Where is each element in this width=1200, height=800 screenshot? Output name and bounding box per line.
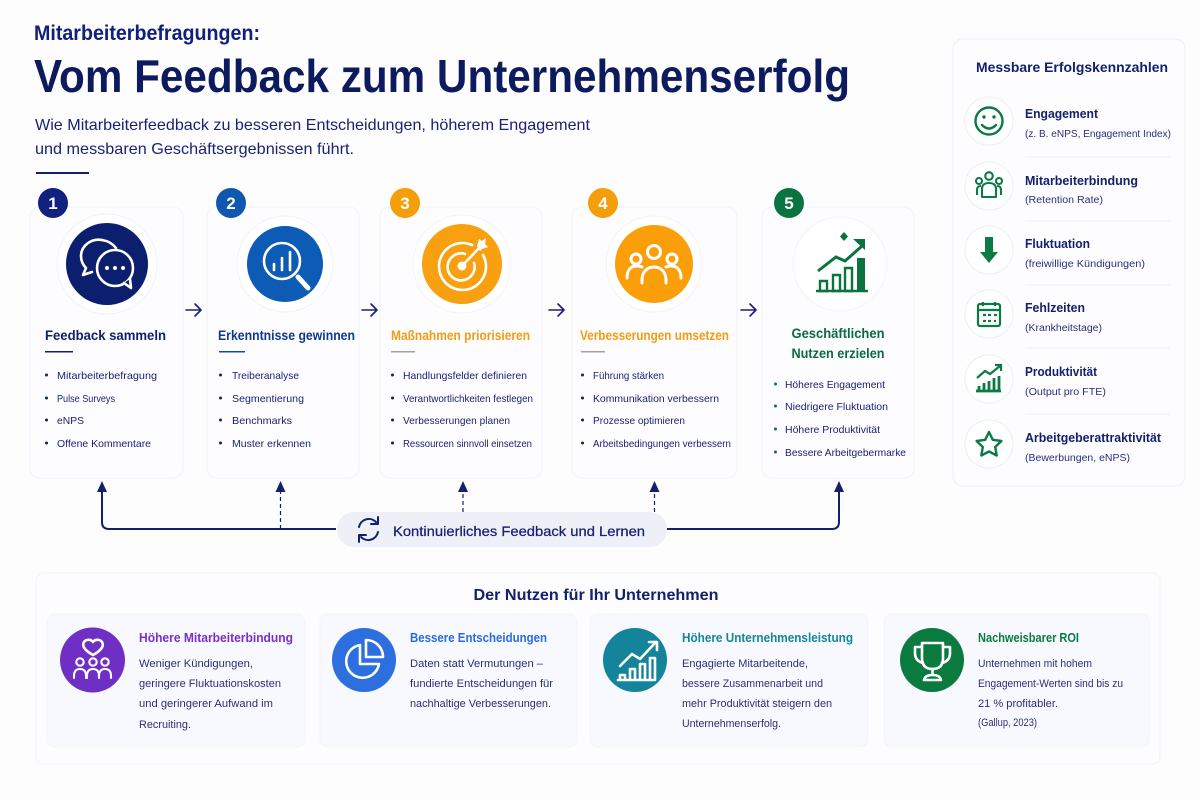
benefit: decisions [320, 614, 577, 747]
heading: Erkenntnisse gewinnen [218, 327, 355, 343]
bullet list: Arbeitsbedingungen verbessern [593, 438, 731, 450]
title: Vom Feedback zum Unternehmenserfolg [34, 50, 850, 102]
panel: step 1 [30, 188, 183, 478]
bullet list: Verantwortlichkeiten festlegen [403, 393, 533, 405]
heading: Nutzen erzielen [792, 345, 884, 361]
panel: step 4 [572, 188, 737, 478]
badge 3: 3 [400, 194, 410, 213]
icon: team [606, 216, 702, 312]
kpi: retention: Mitarbeiterbindung [1025, 174, 1138, 188]
bullet list: Handlungsfelder definieren [403, 370, 527, 382]
subtitle: und messbaren Geschäftsergebnissen führt. [35, 141, 354, 158]
kpi: retention [965, 162, 1138, 210]
benefit text: Weniger Kündigungen, [139, 658, 253, 670]
icon: pie chart [332, 628, 396, 692]
bullet list: Führung stärken [593, 370, 664, 382]
bullet list: Prozesse optimieren [593, 415, 685, 427]
benefit heading: Nachweisbarer ROI [978, 631, 1079, 645]
badge 1 [38, 188, 68, 218]
benefit text: geringere Fluktuationskosten [139, 678, 281, 690]
benefit heading: Höhere Mitarbeiterbindung [139, 631, 293, 645]
badge 5: 5 [784, 194, 794, 213]
benefit: performance [590, 614, 868, 747]
kpi: engagement: (z. B. eNPS, Engagement Index) [1025, 129, 1171, 140]
benefit text: bessere Zusammenarbeit und [682, 678, 823, 690]
panel: KPIs [953, 39, 1185, 486]
bullet list: Treiberanalyse [232, 370, 299, 382]
icon: speech bubbles [57, 214, 157, 314]
benefits heading: Der Nutzen für Ihr Unternehmen [474, 587, 718, 604]
kpi: employer attractiveness: (Bewerbungen, eNPS) [1025, 453, 1130, 464]
arrow: left loop [102, 490, 336, 529]
bullet list: Offene Kommentare [57, 438, 151, 450]
bullet list [581, 370, 731, 450]
kpi: absence [965, 290, 1102, 338]
arrow: dashed 4 [650, 481, 660, 512]
bullet list [391, 370, 533, 450]
bullet list: Ressourcen sinnvoll einsetzen [403, 438, 532, 450]
kpi: absence: (Krankheitstage) [1025, 323, 1102, 334]
badge 2: 2 [226, 194, 236, 213]
heading [792, 325, 884, 361]
panel: step 5 [762, 188, 914, 478]
bullet list [219, 370, 311, 450]
arrow: step 4 to 5 [741, 304, 756, 316]
kicker: Mitarbeiterbefragungen: [34, 21, 260, 45]
label: Kontinuierliches Feedback und Lernen [393, 523, 645, 539]
header [34, 21, 850, 174]
icon: refresh [359, 517, 378, 542]
bullet list: Kommunikation verbessern [593, 393, 719, 405]
benefit text: Daten statt Vermutungen – [410, 658, 544, 670]
kpi: employer attractiveness: Arbeitgeberattraktivität [1025, 431, 1162, 445]
icon: magnifier with chart [237, 216, 333, 312]
arrow: right loop [667, 490, 839, 529]
pill [337, 512, 667, 547]
panel: step 2 [207, 188, 359, 478]
arrow: dashed 3 [458, 481, 468, 512]
benefit text [978, 658, 1123, 729]
kpi: turnover [965, 226, 1145, 274]
kpi: productivity [965, 355, 1106, 403]
heading: Geschäftlichen [792, 325, 884, 341]
benefit text [410, 658, 553, 710]
benefit: ROI [884, 614, 1149, 747]
arrow: dashed 2 [276, 481, 286, 529]
badge 2 [216, 188, 246, 218]
benefit text: fundierte Entscheidungen für [410, 678, 553, 690]
subtitle [35, 117, 591, 158]
panel heading: Messbare Erfolgskennzahlen [976, 59, 1168, 75]
bullet list [45, 370, 157, 450]
bullet list: Höheres Engagement [785, 379, 885, 391]
bullet list: Benchmarks [232, 415, 292, 427]
icon: trophy [900, 628, 964, 692]
benefit text: Recruiting. [139, 719, 191, 731]
bullet list: Niedrigere Fluktuation [785, 401, 888, 413]
arrow: step 3 to 4 [549, 304, 564, 316]
benefit text: (Gallup, 2023) [978, 717, 1037, 729]
bullet list: Mitarbeiterbefragung [57, 370, 157, 382]
badge 4 [588, 188, 618, 218]
heading: Feedback sammeln [45, 327, 166, 343]
kpi: engagement [965, 97, 1171, 145]
kpi: productivity: (Output pro FTE) [1025, 387, 1106, 398]
feedback loop [97, 481, 844, 547]
benefit text: und geringerer Aufwand im [139, 698, 273, 710]
kpi: engagement: Engagement [1025, 107, 1099, 121]
benefit heading: Höhere Unternehmensleistung [682, 631, 853, 645]
kpi: employer attractiveness [965, 420, 1162, 468]
benefit: retention [47, 614, 305, 747]
benefit text: Engagement-Werten sind bis zu [978, 678, 1123, 690]
bullet list: eNPS [57, 415, 84, 427]
icon: rising chart [603, 628, 667, 692]
icon: heart team [60, 628, 125, 692]
bullet list [774, 379, 906, 459]
icon: target [413, 215, 511, 313]
benefit text: mehr Produktivität steigern den [682, 698, 832, 710]
badge 5 [774, 188, 804, 218]
arrow: step 1 to 2 [186, 304, 201, 316]
benefit text: 21 % profitabler. [978, 698, 1058, 710]
benefit text: Unternehmen mit hohem [978, 658, 1092, 670]
benefit text: nachhaltige Verbesserungen. [410, 698, 551, 710]
heading: Maßnahmen priorisieren [391, 327, 530, 343]
bullet list: Segmentierung [232, 393, 304, 405]
kpi: productivity: Produktivität [1025, 365, 1098, 379]
panel: benefits [36, 573, 1160, 764]
benefit text [682, 658, 832, 730]
badge 1: 1 [48, 194, 58, 213]
bullet list: Bessere Arbeitgebermarke [785, 447, 906, 459]
bullet list: Muster erkennen [232, 438, 311, 450]
kpi: turnover: (freiwillige Kündigungen) [1025, 259, 1145, 270]
subtitle: Wie Mitarbeiterfeedback zu besseren Entscheidungen, höherem Engagement [35, 117, 591, 134]
panel: step 3 [380, 188, 542, 478]
heading: Verbesserungen umsetzen [580, 327, 729, 343]
benefit text: Unternehmenserfolg. [682, 718, 781, 730]
badge 3 [390, 188, 420, 218]
benefit text [139, 658, 281, 731]
kpi: absence: Fehlzeiten [1025, 301, 1085, 315]
kpi: retention: (Retention Rate) [1025, 195, 1103, 206]
benefit heading: Bessere Entscheidungen [410, 631, 547, 645]
bullet list: Höhere Produktivität [785, 424, 880, 436]
arrow: step 2 to 3 [362, 304, 377, 316]
bullet list: Pulse Surveys [57, 393, 115, 405]
badge 4: 4 [598, 194, 608, 213]
benefit text: Engagierte Mitarbeitende, [682, 658, 808, 670]
kpi: turnover: Fluktuation [1025, 237, 1090, 251]
icon: growth chart [793, 217, 887, 311]
bullet list: Verbesserungen planen [403, 415, 510, 427]
